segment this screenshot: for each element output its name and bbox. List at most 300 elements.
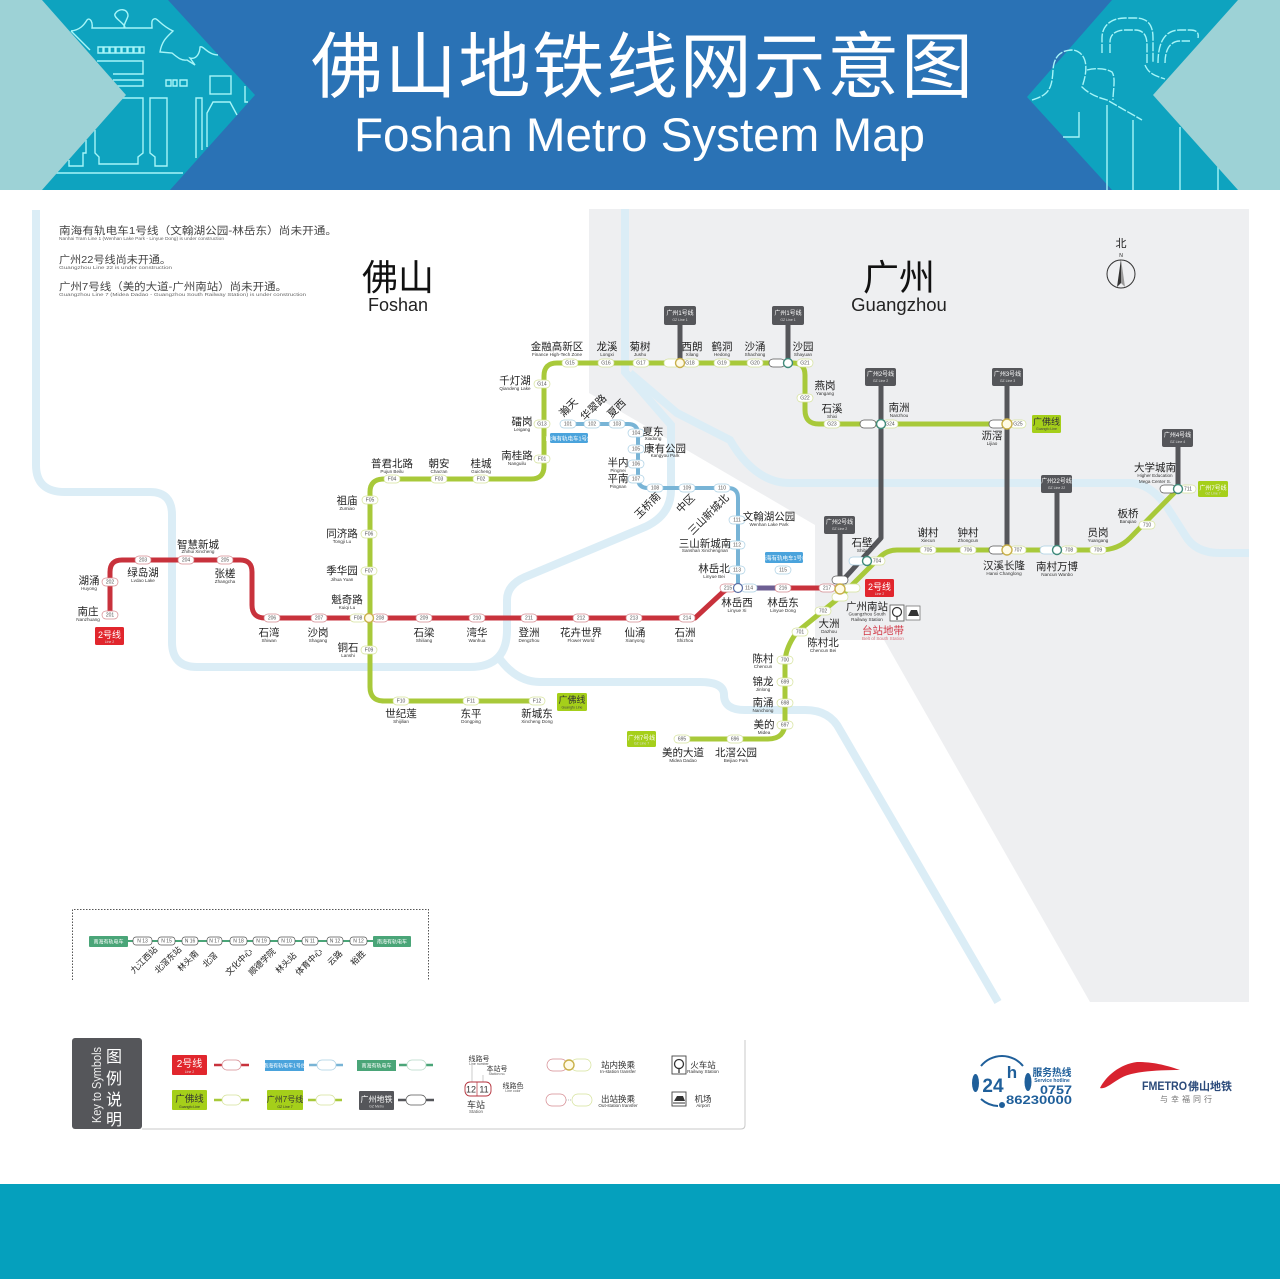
line badge red 2号线 east: Line 2 bbox=[875, 592, 884, 596]
logo: FMETRO Foshan Metro: 佛山地铁 bbox=[1188, 1079, 1232, 1093]
interchange 沙园: Shayuan bbox=[794, 352, 813, 357]
station 美的大道: 美的大道 bbox=[662, 746, 704, 759]
region label Guangzhou bbox=[851, 257, 947, 315]
inset stations: N 19 bbox=[256, 939, 267, 945]
panel: legend bbox=[72, 1038, 745, 1129]
station 华翠路: 102 bbox=[588, 422, 596, 428]
interchange 林岳西: 林岳西 bbox=[721, 596, 753, 609]
interchange 南村万博: 708 bbox=[1065, 548, 1073, 554]
station 沙岗: Shagang bbox=[309, 638, 328, 643]
station 陈村: 陈村 bbox=[752, 652, 774, 665]
station 石洲: 石洲 bbox=[674, 627, 696, 639]
station 花卉世界 bbox=[560, 614, 602, 643]
interchange 大学城南: Mega Center S. bbox=[1139, 479, 1171, 484]
inset station names: 北滘东站 bbox=[152, 944, 184, 975]
station 石湾: Shiwan bbox=[261, 638, 277, 643]
icon: railway key: 火车站 bbox=[690, 1060, 716, 1070]
region label Guangzhou: 广州 bbox=[863, 257, 935, 298]
station 林岳北: Linyue Bei bbox=[703, 574, 725, 579]
station 桂城: F02 bbox=[477, 477, 486, 483]
station 板桥: 板桥 bbox=[1118, 507, 1139, 520]
badge 广州1号线 西朗: GZ Line 1 bbox=[672, 318, 688, 322]
key: line 2: Line 2 bbox=[185, 1070, 194, 1074]
station 石湾 bbox=[258, 614, 280, 643]
line badge 南海有轨电车 lower: 南海有轨电车1号线 bbox=[760, 554, 808, 562]
stations Guangzhou line 7 south bbox=[662, 607, 840, 763]
station 燕岗: Yangang bbox=[816, 391, 834, 396]
right line-art: Lingnan figures bbox=[1032, 18, 1198, 120]
notes: lines not yet opened: 南海有轨电车1号线（文翰湖公园-林岳东）尚未开通。 bbox=[59, 224, 337, 237]
station 瀚天 bbox=[557, 395, 581, 428]
station 登洲: 登洲 bbox=[518, 626, 540, 639]
station 夏西: 103 bbox=[613, 422, 621, 428]
station 礌岗: Leigang bbox=[514, 427, 531, 432]
station 大洲: Dazhou bbox=[821, 629, 837, 634]
station 张槎: 205 bbox=[221, 558, 229, 564]
station 沙涌 bbox=[744, 341, 766, 367]
station 锦龙: Jinlong bbox=[756, 687, 771, 692]
interchange 南洲: 南洲 bbox=[888, 401, 910, 414]
station 千灯湖: 千灯湖 bbox=[499, 375, 531, 387]
station 湖涌: 202 bbox=[106, 580, 114, 586]
station 谢村: 705 bbox=[924, 548, 932, 554]
station 智慧新城 bbox=[177, 538, 219, 564]
legend title tab: 明 bbox=[106, 1112, 122, 1129]
station 沙涌: 沙涌 bbox=[744, 341, 766, 353]
interchange 广州南站: 广州南站 bbox=[846, 600, 888, 613]
line badge 广佛线 east: 广佛线 bbox=[1033, 416, 1060, 427]
key: station anatomy: Station no. bbox=[489, 1072, 505, 1076]
station 锦龙: 锦龙 bbox=[752, 675, 774, 688]
badge 广州4号线 大学城南 bbox=[1162, 429, 1193, 447]
inset stations: N 17 bbox=[209, 939, 220, 945]
interchange 南洲 bbox=[860, 401, 910, 428]
station 南桂路 bbox=[501, 449, 550, 466]
line badge 广州7号线 south bbox=[627, 731, 656, 747]
key: station anatomy: Line number bbox=[469, 1062, 490, 1066]
interchange 西朗 bbox=[664, 341, 702, 368]
rivers bbox=[36, 209, 1249, 1002]
station 菊树: Jushu bbox=[634, 352, 647, 357]
dark Guangzhou connector lines bbox=[680, 325, 1178, 588]
station 花卉世界: 212 bbox=[577, 616, 585, 622]
interchange 大学城南 bbox=[1134, 461, 1196, 494]
legend title tab bbox=[72, 1038, 142, 1129]
key: station anatomy: Line color bbox=[505, 1089, 521, 1093]
station 平南: 107 bbox=[632, 477, 640, 483]
station 礌岗: G13 bbox=[537, 422, 547, 428]
inset badge left bbox=[89, 936, 128, 947]
line badge red 2号线 west: 2号线 bbox=[98, 629, 121, 640]
logo: 24h service hotline: h bbox=[1007, 1063, 1017, 1082]
station 南涌: 南涌 bbox=[752, 696, 774, 709]
station 谢村 bbox=[918, 526, 939, 554]
station 谢村: Xiecun bbox=[921, 538, 935, 543]
key: out-of-station interchange bbox=[546, 1094, 638, 1108]
Guangzhou line badges bbox=[664, 306, 1193, 534]
right teal chevron bbox=[1027, 0, 1238, 190]
station 锦龙: 699 bbox=[781, 680, 789, 686]
badge 广州2号线 南洲: GZ Line 2 bbox=[873, 379, 888, 383]
interchange 西朗: G18 bbox=[685, 361, 695, 367]
station 林岳北: 113 bbox=[733, 568, 741, 574]
station 东平: 东平 bbox=[460, 707, 482, 720]
inset stations: N 11 bbox=[305, 939, 315, 945]
key: in-station interchange: In-station transfer bbox=[600, 1069, 636, 1074]
station 龙溪: 龙溪 bbox=[596, 340, 618, 353]
station 员岗: 709 bbox=[1094, 548, 1102, 554]
key: GZ line 7: GZ Line 7 bbox=[277, 1105, 293, 1109]
station 千灯湖: Qiandeng Lake bbox=[499, 386, 531, 391]
station 朝安 bbox=[428, 457, 450, 483]
station 千灯湖 bbox=[499, 375, 550, 391]
station 花卉世界: 花卉世界 bbox=[560, 626, 602, 639]
station 文翰湖公园: 文翰湖公园 bbox=[743, 510, 795, 523]
line badge 广州7号线 east: 广州7号线 bbox=[1199, 484, 1227, 492]
station 康有公园: 105 bbox=[632, 447, 640, 453]
station 瀚天: 瀚天 bbox=[557, 395, 581, 420]
inset stations: N 15 bbox=[161, 939, 172, 945]
interchange 大学城南: Higher Education bbox=[1137, 473, 1173, 478]
inset station names: 裕胜 bbox=[348, 948, 368, 967]
station 湾华 bbox=[466, 614, 488, 643]
station 夏西: 夏西 bbox=[605, 397, 629, 421]
legend title tab: 例 bbox=[106, 1070, 122, 1088]
logo: 24h service hotline: 服务热线 bbox=[1032, 1066, 1072, 1079]
interchange 魁奇路: F08 bbox=[354, 616, 363, 622]
station 东平 bbox=[460, 697, 482, 724]
station 祖庙 bbox=[336, 494, 378, 511]
station 新城东: Xincheng Dong bbox=[521, 719, 553, 724]
interchange 魁奇路: 208 bbox=[376, 616, 384, 622]
station 祖庙: Zumiao bbox=[339, 506, 355, 511]
key: Nanhai tram: 南海有轨电车1号线 bbox=[263, 1062, 306, 1070]
header banner bbox=[0, 0, 1280, 190]
station 张槎: 张槎 bbox=[214, 567, 236, 580]
station 三山新城北: 110 bbox=[718, 486, 726, 492]
key: station anatomy: 线路号 bbox=[468, 1054, 490, 1063]
badge 广州3号线 沥滘: 广州3号线 bbox=[994, 370, 1021, 378]
station 铜石: F09 bbox=[365, 648, 374, 654]
interchange 沙园: 沙园 bbox=[792, 341, 814, 353]
badge 广州1号线 沙园: GZ Line 1 bbox=[780, 318, 796, 322]
station 湾华: 210 bbox=[473, 616, 481, 622]
line badge red 2号线 west bbox=[95, 627, 124, 645]
station 沙涌: G20 bbox=[750, 361, 760, 367]
station 燕岗: G22 bbox=[800, 396, 810, 402]
interchange 林岳西: 114 bbox=[745, 586, 753, 592]
title English: Foshan Metro System Map bbox=[354, 108, 925, 161]
station 钟村 bbox=[958, 526, 979, 554]
station 鹤洞: Hedong bbox=[714, 352, 730, 357]
inset station names: 林头南 bbox=[175, 948, 200, 973]
station 大洲 bbox=[815, 607, 840, 634]
notes: lines not yet opened: Nanhai Tram Line 1 (Wenhan Lake Park - Linyue Dong) is under construction bbox=[59, 236, 225, 241]
station 花卉世界: Flower World bbox=[568, 638, 595, 643]
station 员岗 bbox=[1088, 527, 1109, 554]
station 大洲: 702 bbox=[819, 609, 827, 615]
Guangfo line bbox=[370, 363, 1007, 701]
station 龙溪: Longxi bbox=[600, 352, 614, 357]
key: in-station interchange bbox=[547, 1059, 636, 1074]
interchange 沥滘: Lijiao bbox=[987, 441, 998, 446]
station 三山新城南 bbox=[679, 537, 745, 553]
interchange 林岳西: 215 bbox=[724, 586, 732, 592]
station 铜石: 铜石 bbox=[338, 642, 358, 654]
station 龙溪: G16 bbox=[601, 361, 611, 367]
station 湾华: 湾华 bbox=[466, 626, 488, 639]
line badge 广州7号线 south: 广州7号线 bbox=[628, 734, 655, 742]
icon: north compass: 北 bbox=[1116, 237, 1126, 250]
station 世纪莲 bbox=[385, 697, 417, 724]
station 仙涌: Xianyong bbox=[625, 638, 645, 643]
key: station anatomy: 本站号 bbox=[486, 1064, 508, 1073]
station 礌岗 bbox=[512, 416, 550, 432]
interchange 沥滘: 沥滘 bbox=[982, 430, 1002, 442]
interchange 林岳西: Linyue Xi bbox=[728, 608, 746, 613]
station 美的: 697 bbox=[781, 723, 789, 729]
badge 广州1号线 西朗 bbox=[664, 306, 696, 325]
station 板桥: 710 bbox=[1143, 523, 1151, 529]
station 美的大道: Midea Dadao bbox=[669, 758, 697, 763]
region label Guangzhou: Guangzhou bbox=[851, 294, 947, 315]
station 绿岛湖 bbox=[127, 556, 159, 583]
station 康有公园: 康有公园 bbox=[644, 442, 686, 455]
station 东平: F11 bbox=[467, 699, 475, 705]
line badge 广佛线 south bbox=[557, 693, 587, 711]
station 世纪莲: F10 bbox=[397, 699, 406, 705]
inset station names bbox=[128, 944, 368, 977]
station 同济路: Tongji Lu bbox=[333, 539, 352, 544]
station 季华园: Jihua Yuan bbox=[331, 577, 354, 582]
inset station names: 九江西站 bbox=[128, 944, 160, 975]
station 东平: Dongping bbox=[461, 719, 481, 724]
station 林岳东: 216 bbox=[779, 586, 787, 592]
badge 广州3号线 沥滘: GZ Line 3 bbox=[1000, 379, 1015, 383]
station 石洲: 214 bbox=[683, 616, 691, 622]
interchange 汉溪长隆: 汉溪长隆 bbox=[983, 559, 1025, 572]
station 北滘公园: 696 bbox=[731, 737, 739, 743]
connector line bbox=[128, 940, 373, 942]
inset stations bbox=[133, 937, 367, 945]
line badge 南海有轨电车 upper: 南海有轨电车1号线 bbox=[545, 434, 593, 442]
badge 广州3号线 沥滘 bbox=[992, 368, 1023, 386]
station 华翠路: 华翠路 bbox=[578, 391, 610, 423]
key: station anatomy bbox=[465, 1054, 524, 1114]
interchange 汉溪长隆: Hanxi Changlong bbox=[986, 571, 1022, 576]
station 普君北路: F04 bbox=[388, 477, 397, 483]
station 陈村: 700 bbox=[781, 658, 789, 664]
icon: railway key: Railway Station bbox=[687, 1069, 719, 1074]
line badge 南海有轨电车 lower bbox=[760, 552, 808, 563]
station 龙溪 bbox=[596, 340, 618, 367]
station 沙岗 bbox=[308, 614, 328, 643]
station 钟村: 钟村 bbox=[958, 526, 979, 539]
station 仙涌: 仙涌 bbox=[624, 626, 646, 639]
badge 广州1号线 沙园: 广州1号线 bbox=[774, 309, 802, 317]
interchange 沙园: G21 bbox=[800, 361, 810, 367]
inset badge right: 南海有轨电车 bbox=[377, 938, 407, 946]
station 员岗: Yuangang bbox=[1088, 538, 1109, 543]
interchange 西朗: Xilang bbox=[686, 352, 699, 357]
interchange 石壁: 704 bbox=[873, 559, 881, 565]
notes: lines not yet opened: 广州7号线（美的大道-广州南站）尚未开通。 bbox=[59, 280, 287, 293]
station 石溪 bbox=[822, 403, 843, 428]
interchange 广州南站 bbox=[819, 576, 904, 641]
station 桂城: Guicheng bbox=[471, 469, 491, 474]
interchange 广州南站: 217 bbox=[823, 586, 831, 592]
tram section under construction bbox=[745, 586, 775, 590]
station 钟村: Zhongcun bbox=[958, 538, 979, 543]
station 沙涌: Shachong bbox=[745, 352, 766, 357]
station 鹤洞: 鹤洞 bbox=[712, 340, 732, 353]
station 湾华: Wanhua bbox=[469, 638, 486, 643]
station 大洲: 大洲 bbox=[818, 617, 840, 630]
logo: 24h service hotline: Service hotline bbox=[1034, 1078, 1070, 1084]
badge 广州1号线 沙园 bbox=[772, 306, 804, 325]
line badge 广佛线 east bbox=[1032, 415, 1061, 433]
region label Foshan: Foshan bbox=[368, 295, 428, 315]
logo: FMETRO Foshan Metro: 与幸福同行 bbox=[1160, 1094, 1212, 1104]
station 林岳北: 林岳北 bbox=[698, 562, 730, 575]
station 北滘公园: 北滘公园 bbox=[715, 747, 757, 759]
station 中区: 109 bbox=[683, 486, 691, 492]
Guangzhou line 7 bbox=[682, 489, 1178, 739]
badge 广州2号线 南洲 bbox=[865, 368, 896, 386]
station 石梁: 石梁 bbox=[414, 626, 435, 639]
key: GZ line 7 bbox=[267, 1090, 342, 1110]
station 平内: Pingnei bbox=[610, 468, 626, 473]
station 新城东: 新城东 bbox=[521, 707, 553, 720]
inset station names: 顺德学院 bbox=[246, 946, 278, 977]
interchange 汉溪长隆 bbox=[983, 545, 1026, 576]
station 南桂路: F01 bbox=[538, 457, 547, 463]
station 平内 bbox=[608, 456, 644, 473]
legend title tab: 图 bbox=[106, 1049, 122, 1066]
notes: lines not yet opened: Guangzhou Line 22 is under construction bbox=[59, 265, 173, 270]
key: station anatomy: Station bbox=[469, 1109, 483, 1114]
station 湖涌: 湖涌 bbox=[78, 575, 100, 587]
station 平南: 平南 bbox=[608, 472, 628, 485]
station 湖涌 bbox=[78, 575, 118, 591]
badge 广州2号线 南站 bbox=[824, 516, 855, 534]
key: out-of-station interchange: 出站换乘 bbox=[601, 1094, 635, 1104]
line badge 广州7号线 east: GZ Line 7 bbox=[1205, 492, 1221, 496]
station 千灯湖: G14 bbox=[537, 382, 547, 388]
station 石湾: 石湾 bbox=[258, 626, 280, 639]
station 石溪: G23 bbox=[827, 422, 837, 428]
station 仙涌 bbox=[624, 614, 646, 643]
station 祖庙: F05 bbox=[366, 498, 375, 504]
inset station names: 文化中心 bbox=[223, 946, 255, 977]
station 康有公园: Kangyou Park bbox=[651, 453, 680, 458]
station 三山新城北: 三山新城北 bbox=[685, 491, 732, 538]
station 平南: Pingnan bbox=[610, 484, 627, 489]
inset stations: N 13 bbox=[137, 939, 148, 945]
station 菊树: 菊树 bbox=[630, 340, 651, 353]
icon: train key: Airport bbox=[696, 1103, 710, 1108]
interchange 沥滘 bbox=[982, 419, 1026, 446]
inset stations: N 18 bbox=[233, 939, 244, 945]
interchange 南洲: Nanzhou bbox=[890, 413, 909, 418]
interchange 广州南站: 台站地带 bbox=[862, 624, 904, 637]
station 湖涌: Huyong bbox=[81, 586, 97, 591]
legend title tab: Key to Symbols bbox=[89, 1047, 104, 1123]
station 夏东: Xiadong bbox=[645, 436, 662, 441]
logo: 24h service hotline: 0757 bbox=[1040, 1083, 1072, 1097]
station 铜石 bbox=[338, 642, 377, 658]
key: station anatomy: 11 bbox=[479, 1084, 489, 1094]
station 沙岗: 207 bbox=[315, 616, 323, 622]
badge 广州1号线 西朗: 广州1号线 bbox=[666, 309, 694, 317]
badge 广州4号线 大学城南: 广州4号线 bbox=[1164, 431, 1191, 439]
badge 广州2号线 南站: GZ Line 2 bbox=[832, 527, 847, 531]
left teal chevron bbox=[42, 0, 255, 190]
station 北滘公园 bbox=[715, 735, 757, 763]
station 季华园 bbox=[326, 564, 377, 582]
inset stations: N 12 bbox=[353, 939, 364, 945]
logo: 24h service hotline bbox=[972, 1056, 1072, 1108]
station 世纪莲: 世纪莲 bbox=[385, 708, 417, 720]
station 陈村 bbox=[752, 652, 793, 669]
station 朝安: Chao'an bbox=[431, 469, 448, 474]
station 陈村北: Chencun Bei bbox=[810, 648, 836, 653]
key: station anatomy: 车站 bbox=[467, 1099, 485, 1110]
key: line 2: 2号线 bbox=[177, 1057, 202, 1070]
interchange 南村万博: Nancun Wanbo bbox=[1041, 572, 1073, 577]
icon: train key bbox=[672, 1092, 712, 1108]
Nanhai tram 1 bbox=[560, 424, 738, 588]
logo: 24h service hotline: 86230000 bbox=[1006, 1093, 1072, 1107]
interchange 沥滘: G25 bbox=[1013, 422, 1023, 428]
station 同济路: F06 bbox=[365, 532, 374, 538]
station 鹤洞: G19 bbox=[717, 361, 727, 367]
station 世纪莲: Shijilian bbox=[393, 719, 409, 724]
key: Guangzhou metro: GZ Metro bbox=[369, 1104, 384, 1108]
station 铜石: Lanshi bbox=[341, 653, 355, 658]
line badge 广佛线 east: Guangfo Line bbox=[1036, 427, 1057, 431]
key: green tram: 南海有轨电车 bbox=[361, 1062, 392, 1070]
station 三山新城南: Sanshan Xinchengnan bbox=[682, 548, 729, 553]
badge 广州22号线 南村万博: 广州22号线 bbox=[1041, 477, 1072, 485]
icon: railway key bbox=[672, 1056, 719, 1074]
line badge red 2号线 west: Line 2 bbox=[105, 640, 114, 644]
key: Guangzhou metro bbox=[359, 1091, 434, 1110]
station 夏东: 104 bbox=[632, 431, 640, 437]
footer band bbox=[0, 1184, 1280, 1279]
station 玉桥: 108 bbox=[651, 486, 659, 492]
station 普君北路: 普君北路 bbox=[371, 457, 413, 470]
key: line 2 bbox=[172, 1055, 249, 1075]
station 燕岗 bbox=[797, 380, 836, 402]
station 智慧新城: Zhihui Xincheng bbox=[182, 549, 215, 554]
station 文翰湖公园: 111 bbox=[733, 518, 741, 524]
station 智慧新城: 智慧新城 bbox=[177, 538, 219, 551]
key: GZ line 7: 广州7号线 bbox=[267, 1094, 303, 1104]
station 沙岗: 沙岗 bbox=[308, 627, 328, 639]
station 南桂路: 南桂路 bbox=[501, 449, 533, 462]
station 普君北路 bbox=[371, 457, 413, 483]
icon: train key: 机场 bbox=[694, 1094, 712, 1104]
station 玉桥: 玉桥南 bbox=[632, 490, 663, 521]
interchange 大学城南: 711 bbox=[1184, 487, 1192, 493]
station 美的: Midea bbox=[758, 730, 771, 735]
station 美的 bbox=[754, 718, 793, 735]
stations Nanhai tram bbox=[557, 391, 795, 613]
station 文翰湖公园 bbox=[729, 510, 795, 527]
station 南涌: Nanchong bbox=[753, 708, 774, 713]
interchange 魁奇路: 魁奇路 bbox=[331, 593, 363, 606]
